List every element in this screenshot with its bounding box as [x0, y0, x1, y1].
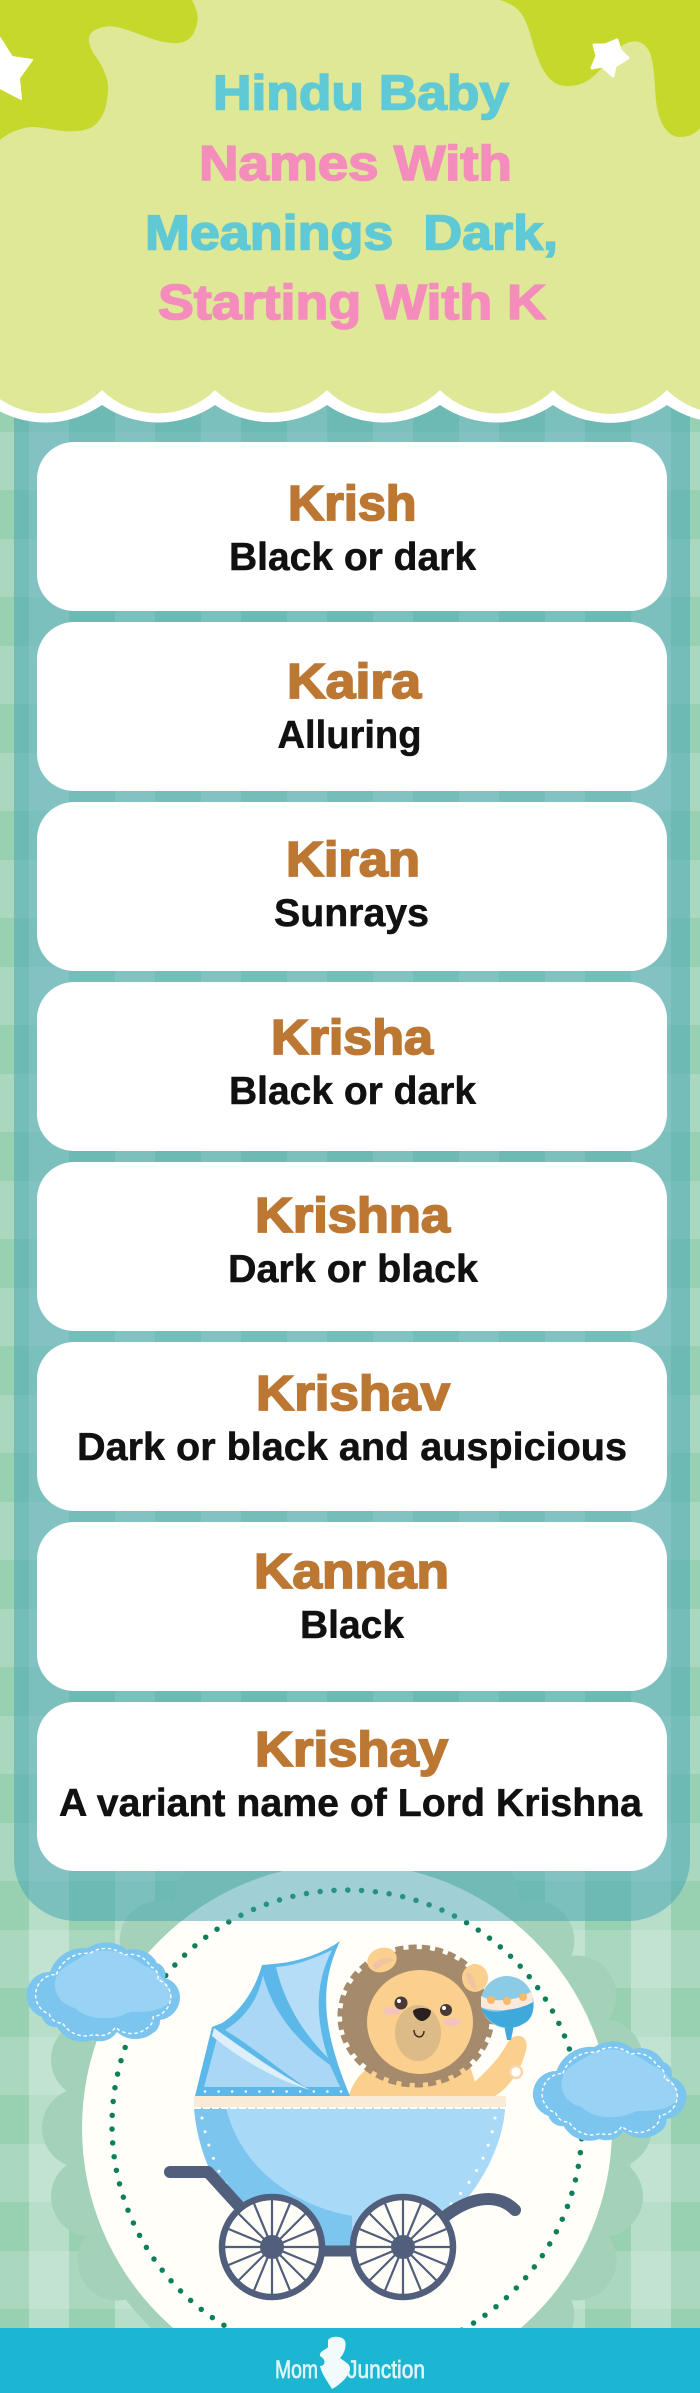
card: Kaira: Kaira: [287, 655, 422, 709]
lion face: [367, 1970, 473, 2074]
icon: right star: [592, 40, 628, 76]
card: Krishay: A variant name of Lord Krishna: [59, 1782, 642, 1825]
card: Kannan: [37, 1522, 667, 1691]
title: Meanings Dark,: [145, 206, 558, 260]
card: Krisha: [37, 982, 667, 1151]
card: Krishna: Dark or black: [228, 1248, 478, 1291]
left wheel: [222, 2197, 322, 2297]
illustration: lion in stroller: [170, 1941, 534, 2297]
card: Krishna: [37, 1162, 667, 1331]
card: Kiran: Sunrays: [274, 892, 429, 935]
card: Krishay: [37, 1702, 667, 1871]
title: [145, 66, 558, 330]
lion body and arm: [348, 2036, 527, 2098]
card: Kiran: Kiran: [286, 833, 420, 887]
stroller rim: [194, 2096, 506, 2108]
lion mane: [342, 1949, 490, 2083]
card: Kannan: Black: [300, 1604, 404, 1647]
card: Kannan: Kannan: [254, 1545, 449, 1599]
card: Krishay: Krishay: [255, 1723, 448, 1777]
icon: MomJunction mother and heart: [320, 2337, 350, 2389]
rattle toy: [481, 1976, 534, 2040]
icon: left cloud: [26, 1942, 180, 2042]
header green background: [0, 0, 700, 414]
card: Krish: [37, 442, 667, 611]
dotted green ring: [112, 1890, 582, 2360]
rattle ring: [510, 2066, 522, 2078]
card: Krishav: [37, 1342, 667, 1511]
logo text: Mom: [275, 2356, 318, 2384]
card: Kaira: [37, 622, 667, 791]
card: Kaira: Alluring: [278, 714, 422, 757]
card: Krish: Black or dark: [229, 536, 476, 579]
top-right lime blob: [500, 0, 700, 137]
icon: left star: [0, 38, 32, 99]
header white scallop edge: [0, 300, 700, 423]
card: Krishav: Dark or black and auspicious: [77, 1426, 627, 1469]
icon: right cloud: [533, 2041, 687, 2141]
card: Kiran: [37, 802, 667, 971]
stroller hood: [195, 1941, 350, 2096]
title: Names With: [199, 137, 512, 191]
card: Krisha: Krisha: [271, 1011, 434, 1065]
card: Krish: Krish: [288, 477, 416, 531]
card: Krisha: Black or dark: [229, 1070, 476, 1113]
white circle behind stroller: [82, 1863, 612, 2393]
header band: [0, 0, 700, 423]
translucent teal panel: [14, 340, 690, 1921]
footer bar: [0, 2328, 700, 2393]
stroller basket: [194, 2108, 505, 2247]
card: Krishav: Krishav: [256, 1367, 451, 1421]
scalloped green shape behind circle: [42, 1844, 652, 2393]
top-left lime blob: [0, 0, 198, 140]
logo text: [275, 2356, 425, 2384]
title: Hindu Baby: [213, 66, 509, 120]
stroller handles and axle: [170, 2172, 515, 2251]
lion ears: [364, 1944, 488, 1992]
title: Starting With K: [158, 276, 546, 330]
logo text: Junction: [347, 2356, 425, 2384]
card: Krishna: Krishna: [255, 1189, 451, 1243]
right wheel: [353, 2197, 453, 2297]
